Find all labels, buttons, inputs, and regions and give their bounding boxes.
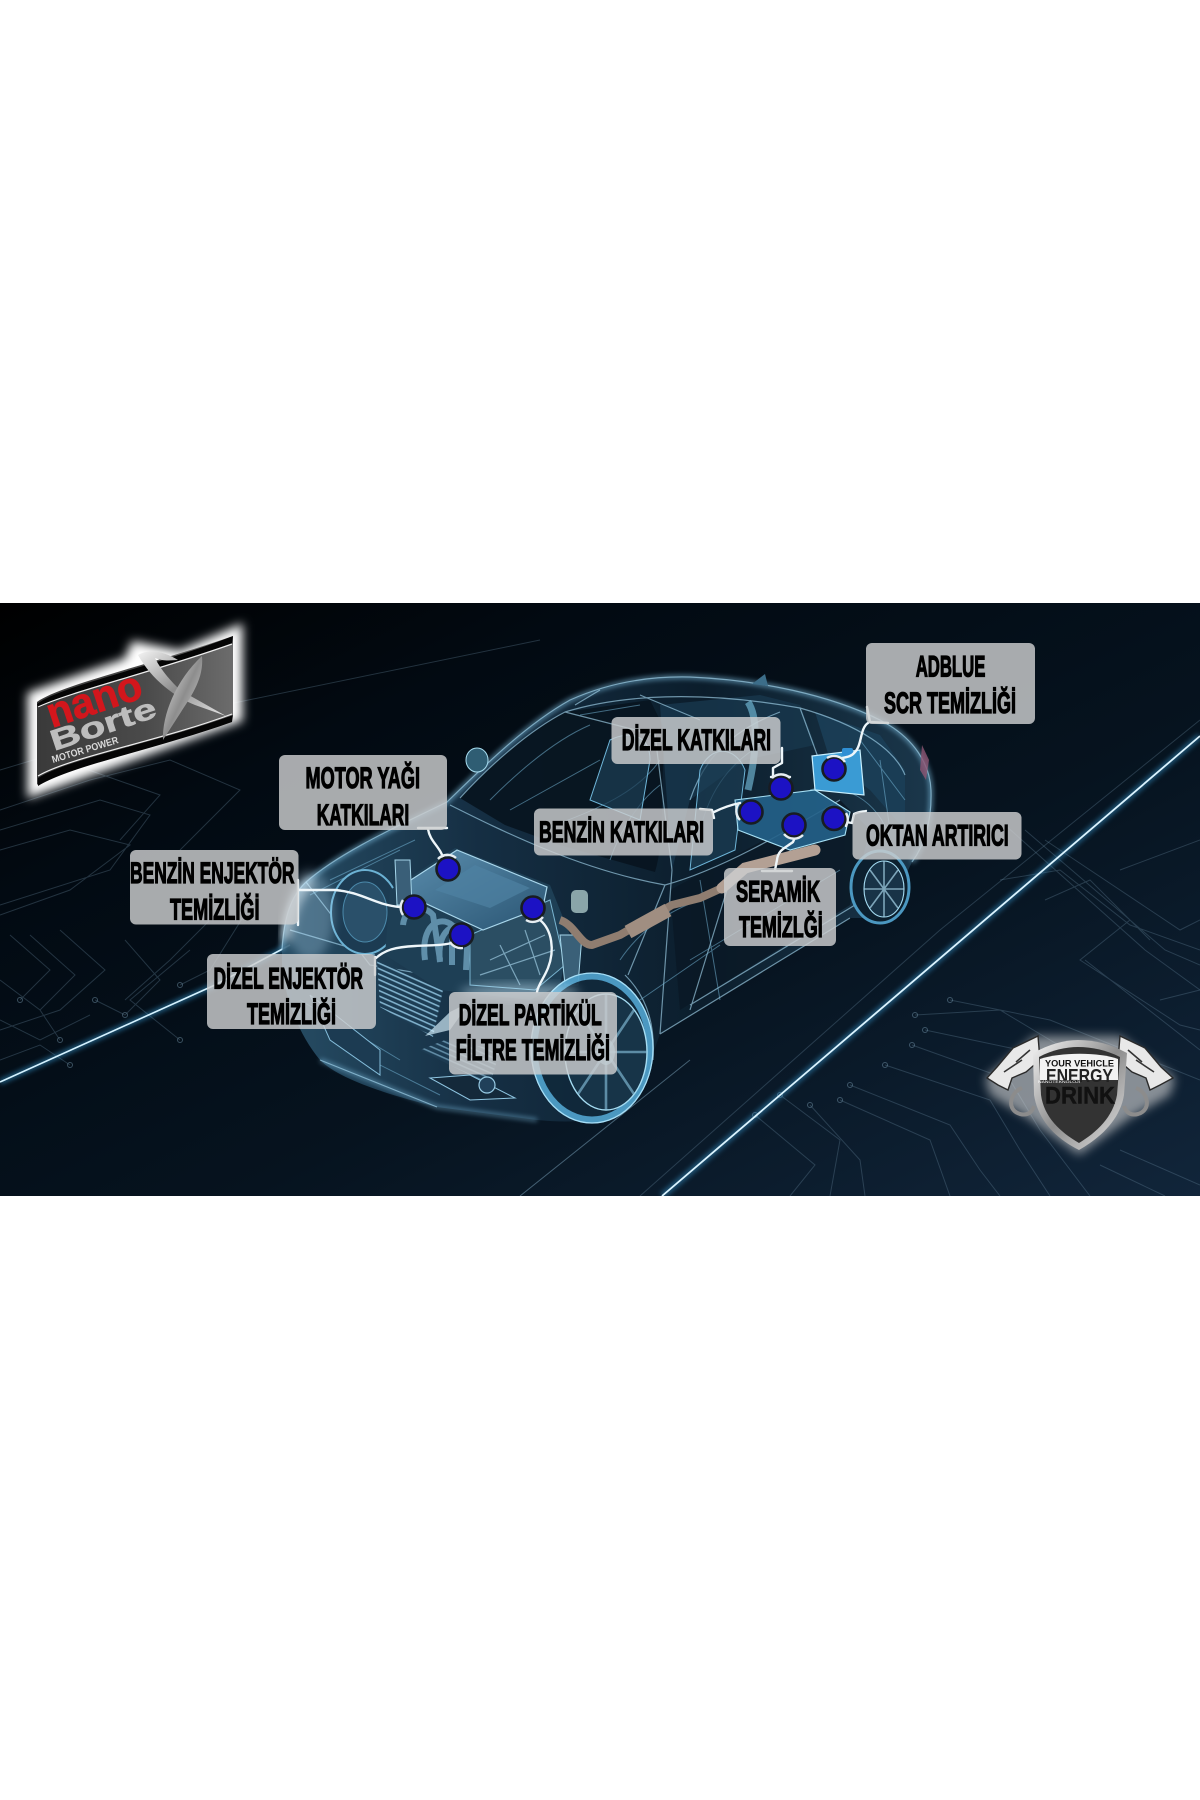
car: reservoir	[571, 890, 588, 913]
car: radiator	[377, 960, 443, 1037]
car: front inner wheel	[331, 870, 399, 954]
car: seats	[590, 735, 745, 870]
connector lines	[298, 707, 888, 992]
label: seramik temizliği: TEMİZLĞİ	[739, 910, 823, 944]
car: interior details	[300, 705, 905, 1095]
marker dots	[401, 756, 848, 948]
label: adblue scr temizliği: ADBLUE	[916, 650, 985, 684]
car: rear wheel	[851, 851, 909, 923]
label: seramik temizliği: SERAMİK	[736, 876, 820, 909]
label: motor yağı katkıları: MOTOR YAĞI	[306, 761, 420, 795]
car: windshield and side glass	[460, 700, 665, 872]
car: body contour lines	[282, 677, 931, 1107]
label: benzin enjektör temizliği: BENZİN ENJEKTÖR	[130, 857, 295, 890]
shield: right wolf head	[1118, 1036, 1173, 1115]
car: lower door panels	[670, 800, 870, 1010]
label: benzin katkıları	[534, 808, 713, 856]
circuit traces left	[0, 640, 540, 1068]
label: dizel enjektör temizliği: DİZEL ENJEKTÖR	[214, 962, 363, 996]
label: adblue scr temizliği: SCR TEMİZLİĞİ	[884, 686, 1016, 720]
car: engine cover	[400, 850, 547, 930]
label: motor yağı katkıları: KATKILARI	[317, 799, 409, 832]
logo: nano borte x	[32, 630, 238, 792]
label: dizel enjektör temizliği	[207, 954, 376, 1031]
logo: energy drink shield: DRINK	[1045, 1082, 1116, 1110]
label: adblue scr temizliği	[866, 643, 1035, 724]
label: seramik temizliği	[724, 868, 836, 946]
label: dizel partikül filtre temizliği: DİZEL PARTİKÜL	[459, 999, 602, 1032]
label: dizel enjektör temizliği: TEMİZLİĞİ	[247, 997, 336, 1031]
label: benzin katkıları: BENZİN KATKILARI	[539, 816, 704, 849]
car: headlight	[425, 1002, 470, 1036]
logo: borte wordmark: Borte	[46, 693, 161, 758]
car: strut towers	[395, 860, 412, 905]
label: oktan artırıcı	[852, 812, 1022, 860]
car: engine bay	[385, 848, 570, 1000]
label: oktan artırıcı: OKTAN ARTIRICI	[866, 820, 1009, 853]
car: exhaust	[560, 888, 722, 945]
logo: energy drink shield: NANOTEKNOLOJİ	[1038, 1079, 1080, 1084]
label: dizel katkıları: DİZEL KATKILARI	[622, 724, 771, 757]
shield: left wolf head	[987, 1036, 1040, 1115]
logo: energy drink shield: ENERGY	[1046, 1066, 1113, 1086]
circuit traces right	[640, 720, 1200, 1196]
logo: energy drink shield: YOUR VEHICLE	[1045, 1059, 1114, 1070]
car: engine lower block	[470, 900, 565, 990]
label: dizel partikül filtre temizliği: FİLTRE TEMİZLİĞİ	[456, 1033, 610, 1067]
car: fin antenna	[752, 674, 768, 686]
logo: nano wordmark: nano	[40, 661, 148, 737]
shield: body	[1033, 1040, 1127, 1150]
car: side mirror	[466, 748, 488, 772]
car: AdBlue tank	[812, 750, 864, 795]
car: filler tube	[748, 702, 755, 790]
car: front wheel	[531, 973, 653, 1123]
logo: x mark	[138, 651, 226, 740]
logo: energy drink shield	[985, 1036, 1175, 1155]
label: benzin enjektör temizliği	[130, 850, 298, 926]
car: tail light	[920, 745, 929, 780]
label: dizel katkıları	[612, 717, 780, 764]
label: dizel partikül filtre temizliği	[449, 992, 617, 1074]
car: fuel tank	[735, 790, 850, 850]
car: outer glow	[282, 677, 931, 950]
logo: motor power: MOTOR POWER	[51, 735, 121, 766]
car: lower grille and fog lamp	[430, 1075, 515, 1100]
car: white front glow	[286, 880, 312, 940]
car: body shell	[282, 677, 931, 1121]
car	[282, 674, 931, 1123]
label: benzin enjektör temizliği: TEMİZLİĞİ	[170, 892, 260, 926]
car: intake manifold tubes	[403, 908, 468, 970]
label: motor yağı katkıları	[279, 755, 447, 832]
banner background	[0, 603, 1200, 1196]
light streaks	[0, 736, 1200, 1196]
